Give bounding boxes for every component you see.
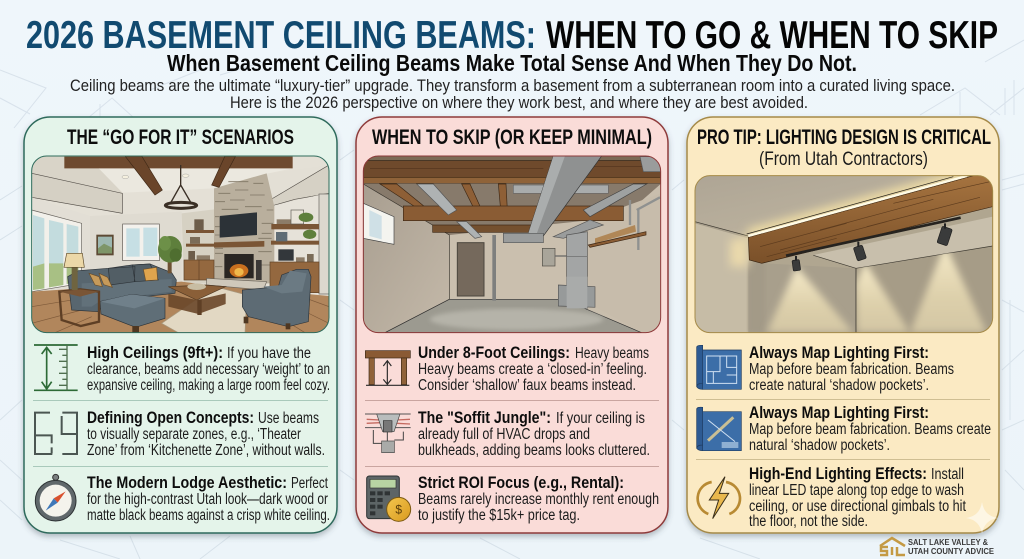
item: high-end lighting effects: Install <box>931 466 964 483</box>
item: map lighting first: create natural ‘shadow pockets’. <box>749 377 929 394</box>
logo: salt lake valley and utah county advice: UTAH COUNTY ADVICE <box>908 546 994 556</box>
item: map lighting first repeat: natural ‘shadow pockets’. <box>749 437 890 454</box>
panel: when to skip <box>356 117 668 533</box>
subheading: from utah contractors: (From Utah Contractors) <box>759 149 928 170</box>
item: high ceilings: High Ceilings (9ft+): <box>87 344 223 362</box>
icon: calculator and coin <box>367 476 411 521</box>
item: defining open concepts: Use beams <box>258 410 319 427</box>
illustration: cluttered basement ceiling <box>363 156 661 333</box>
item: soffit jungle: bulkheads, adding beams looks cluttered. <box>418 442 650 459</box>
item: high-end lighting effects: High-End Lighting Effects: <box>749 465 927 483</box>
intro text <box>70 76 955 112</box>
item: under 8-foot ceilings: Heavy beams <box>575 345 649 362</box>
sparkle watermark <box>966 502 998 534</box>
icon: blueprint beam plan <box>697 407 741 451</box>
item: high ceilings <box>34 344 330 394</box>
subtitle: When Basement Ceiling Beams Make Total Sense And When They Do Not. <box>167 50 857 76</box>
logo: salt lake valley and utah county advice: SALT LAKE VALLEY & <box>908 537 988 547</box>
icon: calculator and coin: $ <box>395 503 402 517</box>
item: under 8-foot ceilings <box>365 344 649 394</box>
icon: blueprint floor plan <box>697 345 741 389</box>
item: under 8-foot ceilings: Under 8-Foot Ceilings: <box>418 344 570 362</box>
item: high-end lighting effects: linear LED tape along top edge to wash <box>749 482 964 499</box>
item: modern lodge aesthetic: matte black beams against a crisp white ceiling. <box>87 507 330 524</box>
item: modern lodge aesthetic: for the high-contrast Utah look—dark wood or <box>87 491 328 508</box>
item: high-end lighting effects: the floor, not the side. <box>749 513 868 530</box>
item: map lighting first repeat <box>697 404 991 454</box>
item: high ceilings: expansive ceiling, making a large room feel cozy. <box>87 377 330 394</box>
panel: pro tip <box>687 117 999 533</box>
item: under 8-foot ceilings: Consider ‘shallow’ faux beams instead. <box>418 377 636 394</box>
item: high ceilings: clearance, beams add necessary ‘weight’ to an <box>87 361 330 378</box>
icon: compass <box>35 474 76 521</box>
item: defining open concepts <box>35 409 325 459</box>
item: defining open concepts: Defining Open Concepts: <box>87 409 254 427</box>
item: map lighting first <box>697 344 954 394</box>
item: high-end lighting effects: ceiling, or use directional gimbals to hit <box>749 498 967 515</box>
illustration: beam lighting <box>695 173 993 333</box>
heading: when to skip: WHEN TO SKIP (OR KEEP MINIMAL) <box>372 126 652 149</box>
icon: low ceiling <box>365 351 410 385</box>
title: 2026 BASEMENT CEILING BEAMS: <box>26 14 536 57</box>
item: under 8-foot ceilings: Heavy beams create a ‘closed-in’ feeling. <box>418 361 647 378</box>
item: soffit jungle <box>365 409 650 459</box>
item: map lighting first repeat: Always Map Lighting First: <box>749 404 929 422</box>
icon: ceiling height ruler <box>34 345 78 390</box>
item: modern lodge aesthetic: The Modern Lodge Aesthetic: <box>87 474 287 492</box>
icon: floor plan <box>35 413 77 454</box>
item: strict roi focus: to justify the $15k+ price tag. <box>418 507 580 524</box>
item: high-end lighting effects <box>698 465 967 530</box>
panel: go for it scenarios <box>24 117 337 533</box>
item: high ceilings: If you have the <box>227 345 311 362</box>
icon: house logo <box>880 538 905 555</box>
logo: salt lake valley and utah county advice <box>880 537 994 556</box>
item: strict roi focus: Beams rarely increase monthly rent enough <box>418 491 659 508</box>
intro text: Here is the 2026 perspective on where they work best, and where they are best avoided. <box>230 93 808 112</box>
item: modern lodge aesthetic <box>35 474 330 524</box>
item: modern lodge aesthetic: Perfect <box>291 475 329 492</box>
title <box>26 14 998 57</box>
icon: lightning bolt <box>698 477 740 519</box>
item: soffit jungle: already full of HVAC drops and <box>418 426 590 443</box>
item: soffit jungle: The "Soffit Jungle": <box>418 409 551 427</box>
item: defining open concepts: to visually separate zones, e.g., ‘Theater <box>87 426 301 443</box>
item: defining open concepts: Zone’ from ‘Kitchenette Zone’, without walls. <box>87 442 325 459</box>
illustration: living room with beams <box>32 156 329 333</box>
item: strict roi focus: Strict ROI Focus (e.g., Rental): <box>418 474 624 492</box>
item: map lighting first: Always Map Lighting First: <box>749 344 929 362</box>
item: map lighting first: Map before beam fabrication. Beams <box>749 361 954 378</box>
icon: hvac soffit <box>365 414 411 453</box>
item: soffit jungle: If your ceiling is <box>556 410 645 427</box>
heading: go for it: THE “GO FOR IT” SCENARIOS <box>67 126 294 149</box>
item: strict roi focus <box>367 474 659 524</box>
